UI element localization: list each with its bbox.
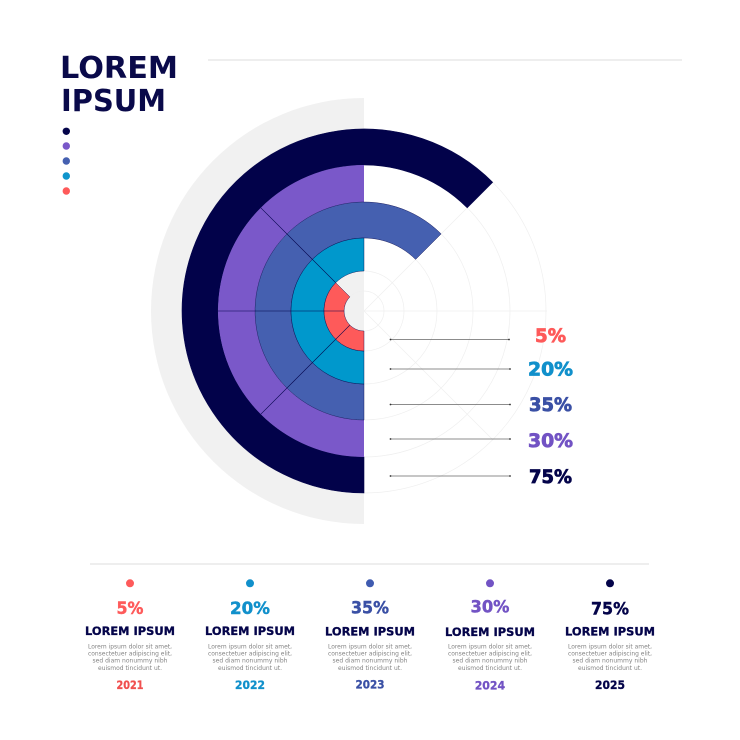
chart value labels [528, 325, 573, 488]
ring: 75% navy [182, 129, 493, 493]
column: 2023: 2023 [356, 678, 384, 692]
column: 2024: LOREM IPSUM [445, 625, 535, 639]
column: 2023: sed diam nonummy nibh [332, 658, 408, 665]
column: 2022: sed diam nonummy nibh [212, 658, 288, 665]
ring: 35% blue [255, 202, 441, 420]
column: 2023: 35% [351, 599, 389, 619]
column: 2025: 2025 [595, 678, 625, 692]
title [60, 51, 178, 119]
column: 2025: Lorem ipsum dolor sit amet, [568, 644, 652, 651]
chart value labels: 75% [529, 466, 572, 488]
column: 2025: consectetuer adipiscing elit, [568, 651, 652, 658]
column: 2023: euismod tincidunt ut. [338, 665, 402, 672]
chart value labels: 30% [528, 430, 573, 452]
column: 2021: LOREM IPSUM [85, 624, 175, 638]
column: 2024: 2024 [475, 678, 505, 692]
column: 2025: sed diam nonummy nibh [572, 658, 648, 665]
column: 2024 [445, 579, 535, 692]
radial bar chart [182, 129, 493, 493]
grey background semicircle [151, 98, 364, 524]
column: 2022 [205, 579, 295, 692]
column: 2022: 20% [230, 599, 270, 619]
column: 2023: consectetuer adipiscing elit, [328, 651, 412, 658]
column: 2024: 30% [470, 598, 510, 618]
column: 2022: LOREM IPSUM [205, 624, 295, 638]
column: 2022: 2022 [235, 678, 265, 692]
column: 2022: euismod tincidunt ut. [218, 665, 282, 672]
column: 2025: euismod tincidunt ut. [578, 665, 642, 672]
column: 2023: Lorem ipsum dolor sit amet, [328, 644, 412, 651]
column: 2021: 5% [116, 599, 144, 619]
column: 2024: euismod tincidunt ut. [458, 665, 522, 672]
ring: 30% purple [218, 165, 364, 457]
chart value labels: 5% [535, 325, 566, 347]
column: 2025 [565, 579, 655, 692]
ring: 20% cyan [291, 238, 364, 384]
column: 2021: euismod tincidunt ut. [98, 665, 162, 672]
column: 2024: consectetuer adipiscing elit, [448, 651, 532, 658]
title: IPSUM [61, 84, 166, 119]
column: 2022: consectetuer adipiscing elit, [208, 651, 292, 658]
column: 2025: LOREM IPSUM [565, 624, 655, 638]
chart value labels: 20% [528, 358, 573, 380]
ring: 5% red [324, 283, 364, 351]
column: 2021: 2021 [116, 678, 144, 692]
column: 2021 [85, 579, 175, 692]
column: 2023 [325, 579, 415, 692]
title: LOREM [60, 51, 178, 86]
chart value labels: 35% [529, 394, 572, 416]
column: 2021: sed diam nonummy nibh [92, 658, 168, 665]
column: 2024: sed diam nonummy nibh [452, 658, 528, 665]
column: 2024: Lorem ipsum dolor sit amet, [448, 644, 532, 651]
column: 2025: 75% [591, 599, 629, 619]
leader lines [390, 339, 511, 477]
column: 2021: consectetuer adipiscing elit, [88, 651, 172, 658]
legend dots [63, 128, 70, 195]
column: 2022: Lorem ipsum dolor sit amet, [208, 644, 292, 651]
column: 2021: Lorem ipsum dolor sit amet, [88, 644, 172, 651]
column: 2023: LOREM IPSUM [325, 624, 415, 638]
